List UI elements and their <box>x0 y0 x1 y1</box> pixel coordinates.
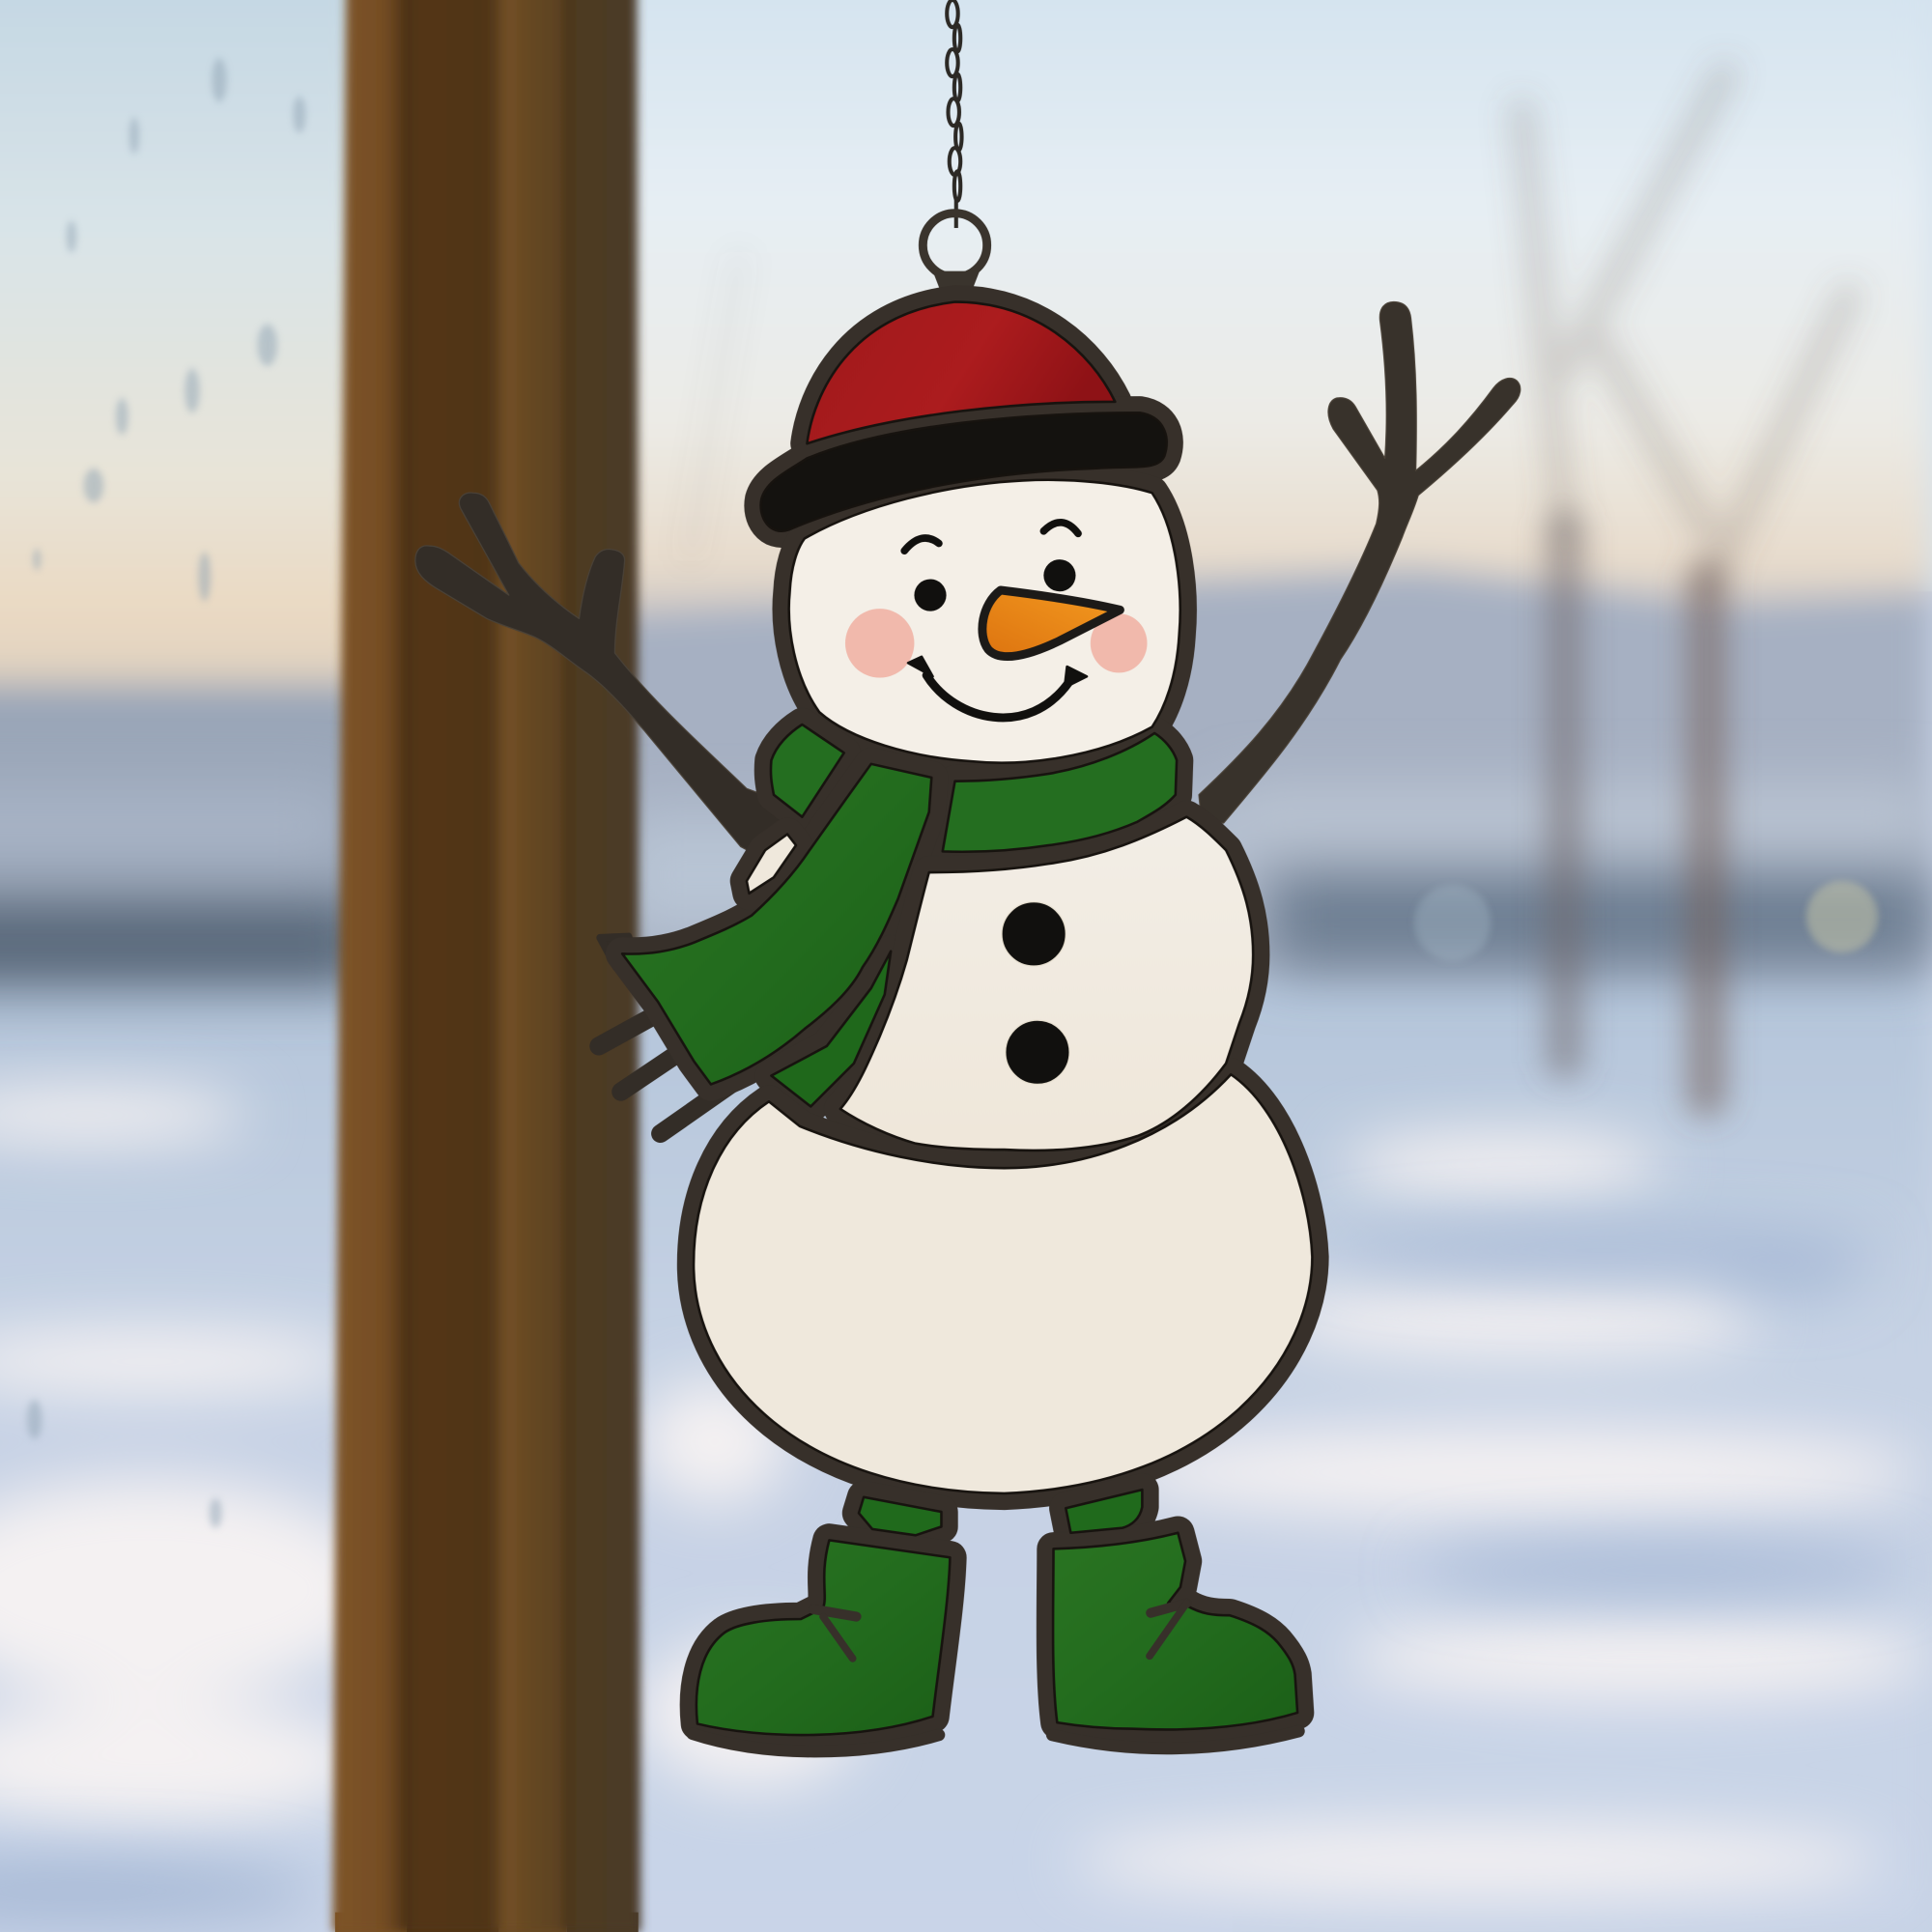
glass panels <box>622 301 1312 1735</box>
buttons <box>1002 902 1069 1084</box>
middle snowball <box>840 817 1253 1151</box>
scarf fringe <box>599 1012 734 1133</box>
right twig arm <box>1199 301 1520 823</box>
left boot <box>696 1540 950 1735</box>
blurred trees <box>690 74 1848 1096</box>
boot sole lead <box>693 1731 1298 1751</box>
shoulder sliver <box>747 835 796 894</box>
scarf corner lead <box>600 936 640 974</box>
hat dome <box>807 301 1115 443</box>
cheeks <box>845 609 1148 678</box>
right leg <box>1065 1490 1142 1533</box>
snowman suncatcher <box>415 213 1520 1751</box>
window frame: wooden post <box>332 0 640 1932</box>
eyes and brows <box>904 523 1078 611</box>
scarf left knot <box>771 724 844 817</box>
snow shadows <box>0 1226 1910 1926</box>
boot strap spikes <box>813 1603 1186 1659</box>
smile <box>908 657 1087 718</box>
hat brim <box>761 412 1167 531</box>
scarf rear tail <box>771 952 891 1106</box>
hanging chain <box>947 0 962 228</box>
lens flares <box>1414 881 1878 961</box>
bottom snowball <box>694 1074 1312 1493</box>
carrot nose <box>982 590 1120 657</box>
lead came framework <box>622 301 1312 1735</box>
scarf front tail <box>622 764 931 1084</box>
snow highlights <box>0 1088 1932 1897</box>
head <box>789 480 1180 763</box>
left twig arm <box>415 493 801 863</box>
left leg <box>859 1497 941 1535</box>
right boot <box>1053 1533 1297 1729</box>
scarf neck band <box>943 733 1177 852</box>
raindrops on glass <box>27 58 305 1528</box>
hanging ring <box>923 213 987 294</box>
